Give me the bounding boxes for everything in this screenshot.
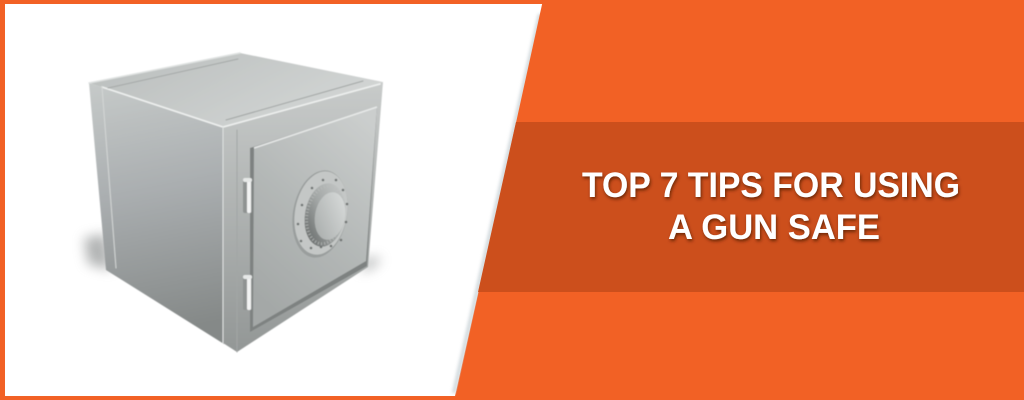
orange block covering the slanted shadow [455,0,1024,400]
title: A GUN SAFE [668,208,880,247]
safe door [250,107,377,332]
safe front face [223,82,383,352]
title [582,166,960,247]
icon: gun safe [84,53,383,352]
safe body [89,53,383,352]
slanted edge shadow [452,14,542,393]
icon: lower door hinge [243,275,252,310]
safe edge highlights [89,53,380,352]
panel: white slanted image area [5,4,543,396]
safe top face [89,53,383,127]
safe left face [89,83,224,344]
safe floor shadow [84,234,382,272]
dial dots [297,179,348,249]
icon: upper door hinge [243,178,252,213]
title: TOP 7 TIPS FOR USING [582,166,960,205]
dial knob [311,190,349,242]
panel: dark title band [478,122,1024,292]
icon: combination dial [286,166,354,262]
